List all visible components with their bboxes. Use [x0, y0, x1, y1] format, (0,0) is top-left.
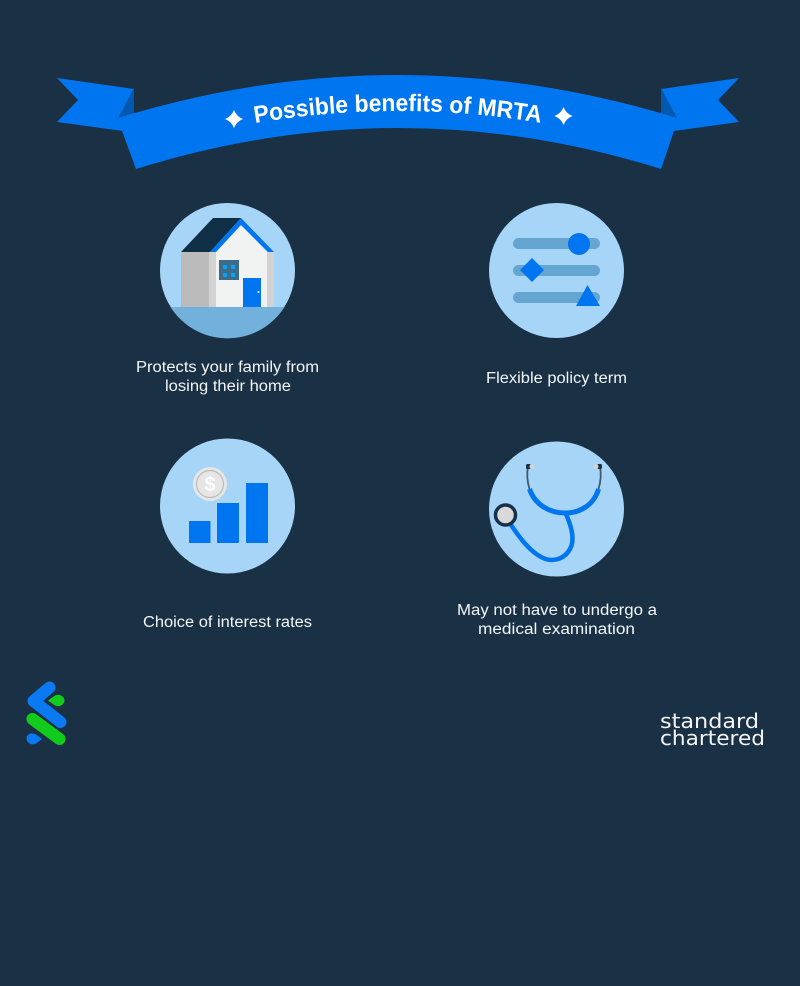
title: Possible benefits of MRTA	[254, 94, 540, 123]
icon: right star	[554, 107, 572, 125]
label: interest rates: Choice of interest rates	[143, 614, 312, 631]
icon: bar chart with coin: $	[204, 474, 216, 496]
label: flexible term: Flexible policy term	[486, 370, 627, 387]
icon: stethoscope	[489, 442, 624, 576]
icon: left star	[225, 110, 243, 128]
banner	[57, 75, 739, 169]
wordmark: standard	[660, 709, 759, 733]
label: medical examination: medical examination	[478, 621, 635, 638]
icon: house	[160, 203, 295, 338]
banner right fold	[661, 88, 677, 118]
label: home protection	[136, 359, 319, 395]
label: home protection: Protects your family from	[136, 359, 319, 376]
logo mark	[26, 688, 64, 744]
wordmark: chartered	[660, 726, 765, 750]
banner left tail	[57, 78, 134, 131]
banner right tail	[661, 78, 739, 131]
panel: medical examination	[457, 442, 657, 638]
icon: bar chart with coin	[160, 438, 295, 574]
label: medical examination	[457, 602, 657, 638]
wordmark	[660, 709, 765, 750]
banner main ribbon	[118, 75, 677, 169]
panel: home protection	[136, 203, 319, 395]
banner left fold	[118, 88, 134, 118]
icon: sliders	[489, 203, 624, 338]
label: home protection: losing their home	[165, 378, 291, 395]
label: medical examination: May not have to undergo a	[457, 602, 657, 619]
panel: interest rates	[143, 438, 312, 631]
panel: flexible term	[486, 203, 627, 387]
